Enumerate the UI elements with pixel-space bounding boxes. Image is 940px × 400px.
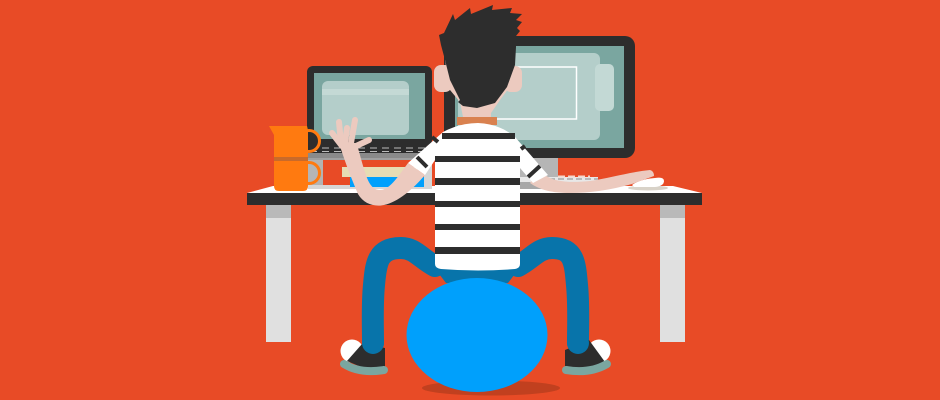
orange jug: [269, 126, 320, 191]
exercise ball: [406, 278, 548, 392]
ears: [434, 65, 522, 92]
monitor: [444, 36, 635, 177]
desk top: [247, 186, 702, 205]
striped shirt: [408, 123, 548, 270]
right arm: [530, 170, 654, 193]
hair: [439, 5, 522, 108]
books and stand under laptop: [308, 153, 432, 189]
shirt collar: [457, 117, 497, 125]
desk legs: [266, 205, 685, 342]
ball shadow: [422, 380, 560, 396]
neck and face: [445, 60, 515, 117]
keyboard: [520, 176, 598, 189]
legs: [373, 248, 578, 343]
right shoe: [565, 332, 610, 371]
mouse: [628, 178, 668, 190]
left arm: [332, 120, 425, 206]
pelvis: [430, 262, 520, 283]
left shoe: [340, 332, 385, 371]
laptop: [307, 66, 432, 158]
